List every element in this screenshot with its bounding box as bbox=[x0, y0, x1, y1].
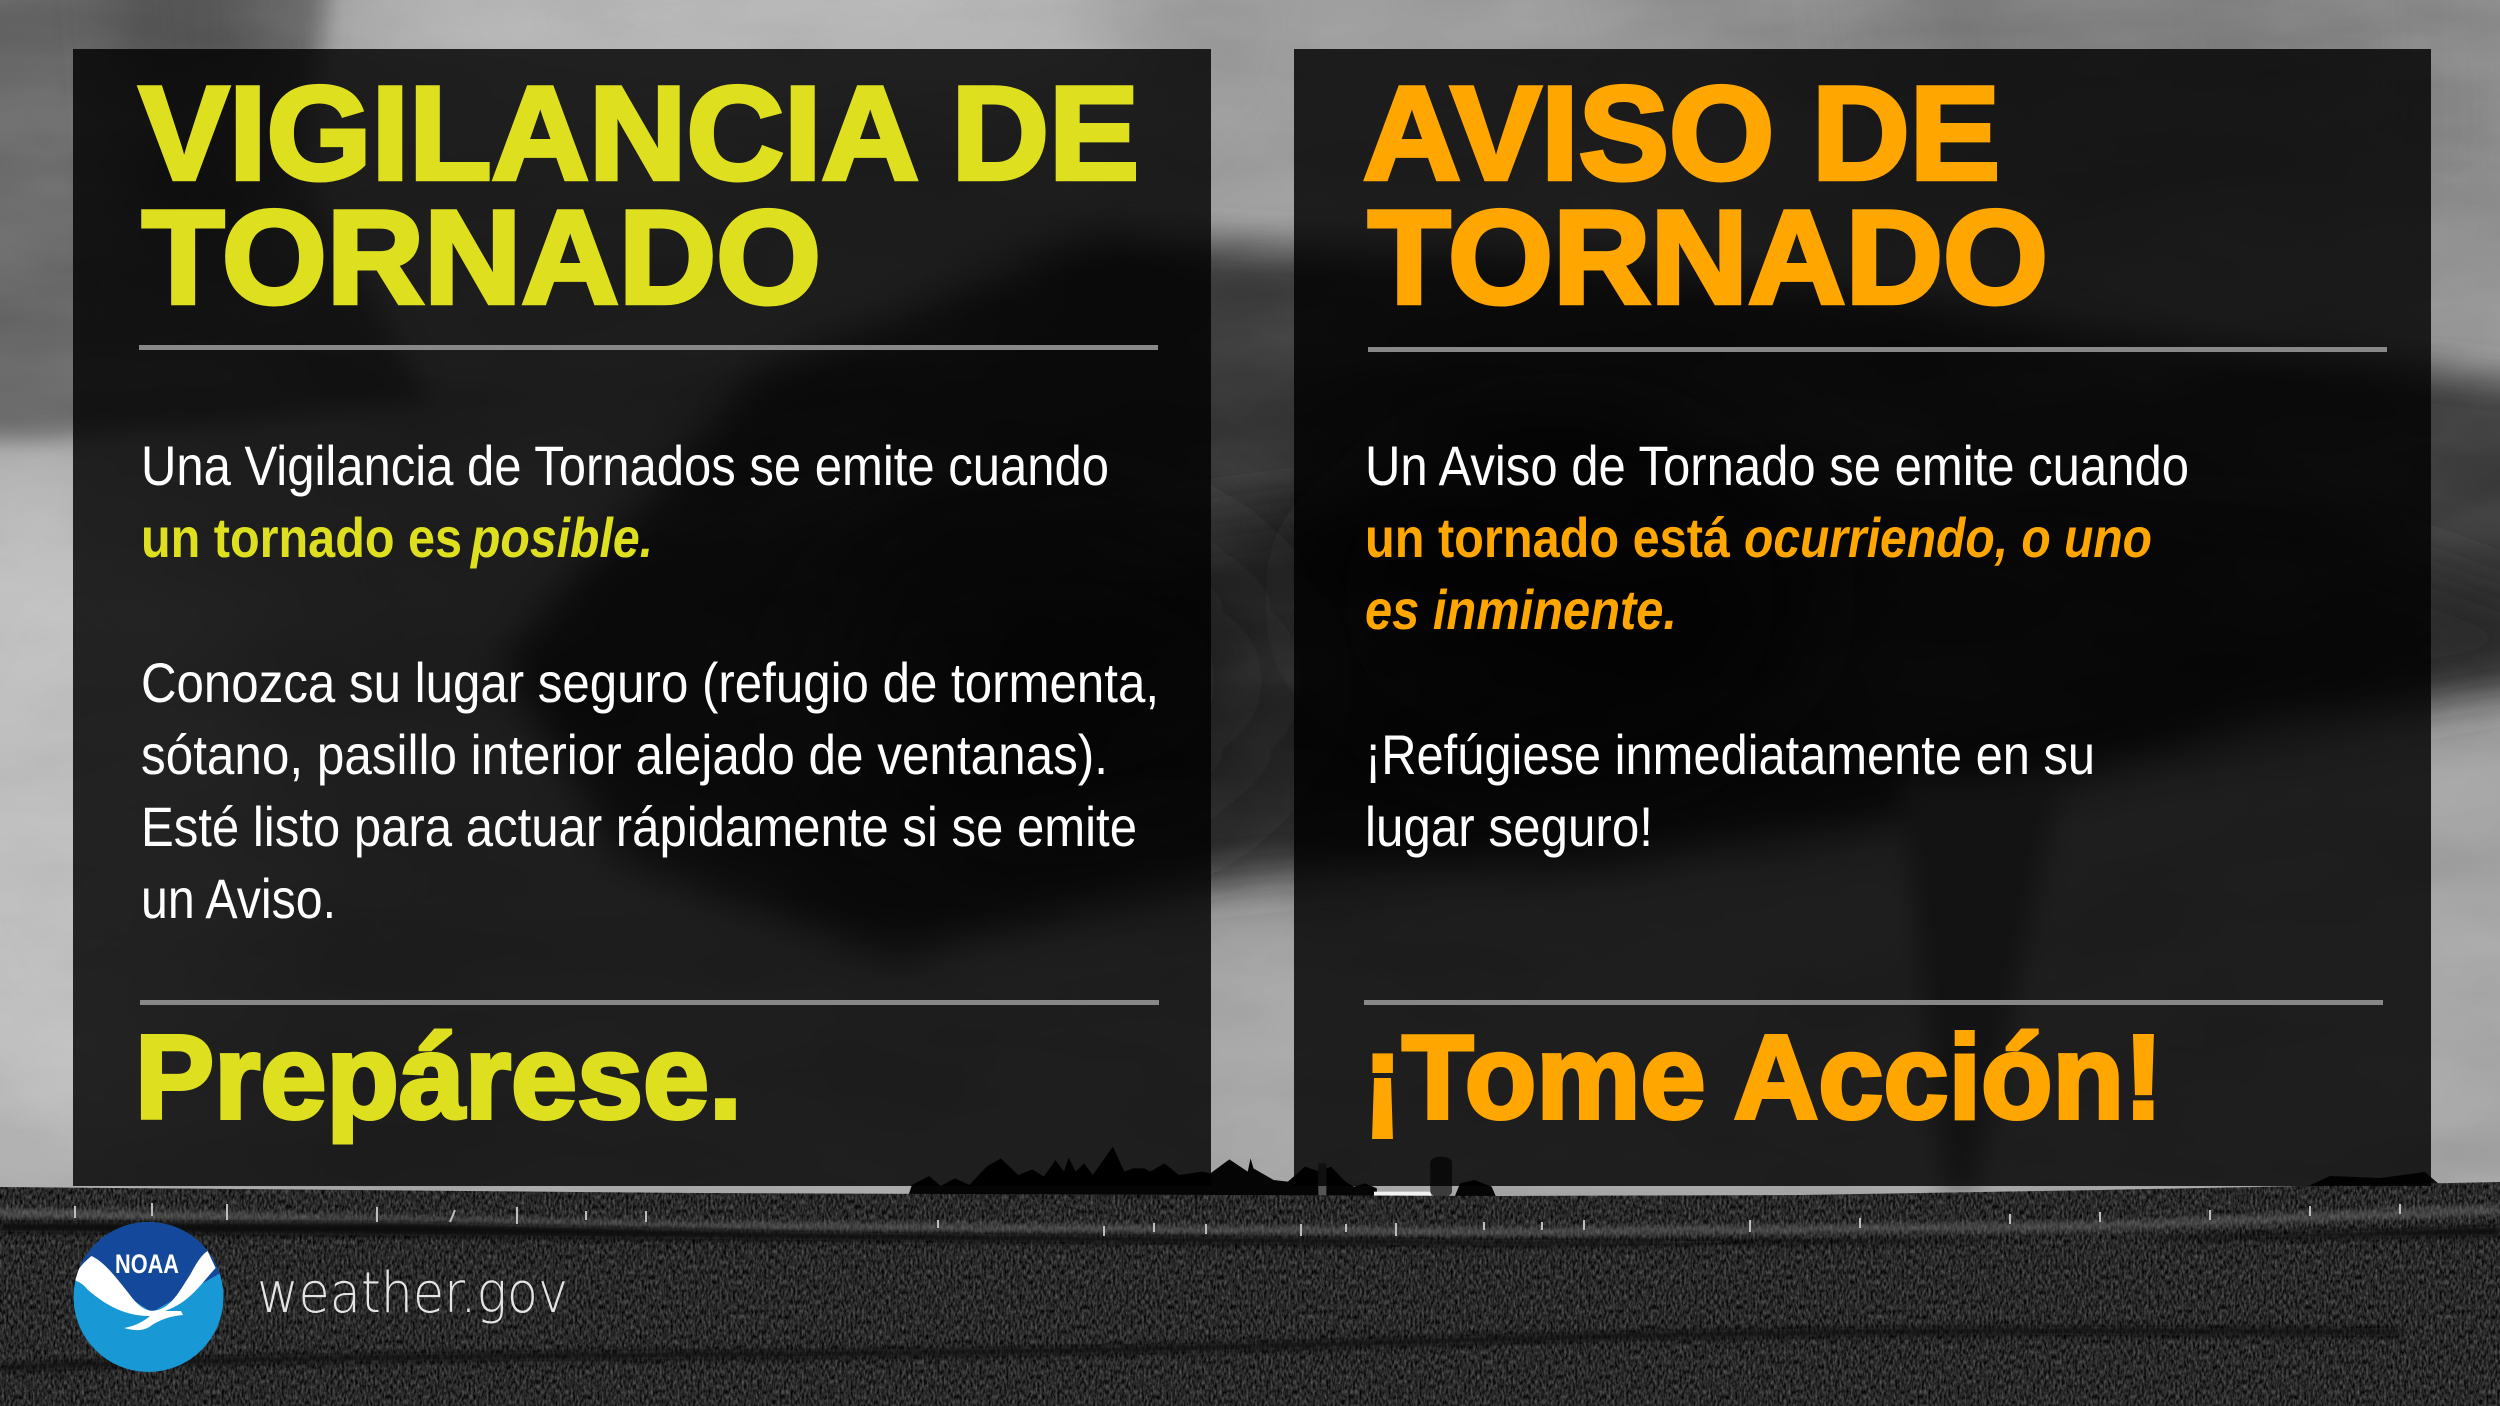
text block: safety advice bbox=[141, 651, 1159, 930]
panel background bbox=[1294, 49, 2431, 1186]
ground: dark field bbox=[0, 1180, 2500, 1406]
heading: aviso de tornado: TORNADO bbox=[1368, 184, 2048, 332]
text block: definition: Un Aviso de Tornado se emite cuando bbox=[1365, 434, 2189, 497]
text block: definition bbox=[1365, 434, 2189, 641]
fence posts bbox=[75, 1203, 2400, 1236]
text block: safety advice: ¡Refúgiese inmediatamente en su bbox=[1365, 723, 2095, 786]
heading: vigilancia de tornado bbox=[139, 60, 1139, 332]
text block: safety advice bbox=[1365, 723, 2095, 858]
landscape: tree line and farm bbox=[908, 1147, 2440, 1197]
text block: definition: un tornado es bbox=[141, 506, 462, 569]
text block: safety advice: sótano, pasillo interior alejado de ventanas). bbox=[141, 723, 1108, 786]
heading: vigilancia de tornado: TORNADO bbox=[142, 184, 821, 332]
website: weather.gov: weather.gov bbox=[257, 1261, 568, 1326]
text block: safety advice: lugar seguro! bbox=[1365, 795, 1653, 858]
text block: definition: es inminente. bbox=[1365, 578, 1677, 641]
call to action: prepárese: Prepárese. bbox=[135, 1011, 742, 1144]
text block: definition: un tornado está bbox=[1365, 506, 1731, 569]
panel background bbox=[73, 49, 1211, 1186]
panel: tornado watch bbox=[73, 49, 1211, 1186]
text block: safety advice: un Aviso. bbox=[141, 867, 336, 930]
text block: definition: ocurriendo, o uno bbox=[1744, 506, 2152, 569]
text block: safety advice: Conozca su lugar seguro (refugio de tormenta, bbox=[141, 651, 1159, 714]
heading: aviso de tornado bbox=[1363, 60, 2048, 332]
icon: tornado funnel bbox=[1918, 818, 2040, 1192]
text block: definition bbox=[141, 434, 1109, 569]
call to action: tome acción: ¡Tome Acción! bbox=[1363, 1011, 2163, 1144]
panel: tornado warning bbox=[1294, 49, 2431, 1186]
heading: aviso de tornado: AVISO DE bbox=[1363, 60, 2000, 208]
heading: vigilancia de tornado: VIGILANCIA DE bbox=[139, 60, 1139, 208]
text block: safety advice: Esté listo para actuar rápidamente si se emite bbox=[141, 795, 1137, 858]
icon: NOAA logo bbox=[74, 1222, 224, 1372]
text block: definition: Una Vigilancia de Tornados se emite cuando bbox=[141, 434, 1109, 497]
icon: NOAA logo: NOAA bbox=[115, 1249, 179, 1279]
text block: definition: posible. bbox=[469, 506, 653, 569]
